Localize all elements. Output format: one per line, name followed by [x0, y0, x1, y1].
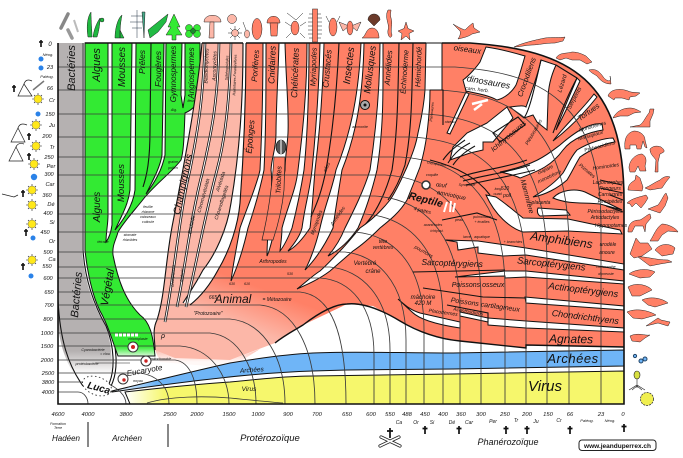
text: fungi: 665	[209, 295, 217, 301]
bottom axis: time values: 2500	[163, 412, 177, 418]
panel: archaea band	[112, 350, 624, 392]
text: fish and amphibians: Poissons osseux	[452, 282, 505, 289]
icons: top row plants and fungi	[61, 10, 250, 40]
bottom axis: periods: Cr	[556, 418, 562, 424]
text: fungi: Basidiomycètes	[203, 48, 211, 84]
text: fungi: Ascomycètes	[211, 51, 219, 82]
text: fungi: Endarés	[179, 268, 185, 282]
bottom axis: time values: 66	[567, 412, 574, 418]
icons: blue stars	[28, 56, 44, 278]
bottom axis: time values: 4600	[52, 412, 65, 418]
text: fish and amphibians: mâchoire	[411, 295, 436, 301]
text: reptiles and birds: Synapside	[459, 183, 475, 187]
icons: extinction crosses and volcanoes	[2, 40, 44, 270]
left axis: time values and periods: 450	[40, 230, 51, 236]
text: fish and amphibians: dipneuste	[598, 272, 614, 276]
left axis: time values and periods: Dé	[47, 202, 55, 208]
text: fungi: ρ	[160, 333, 165, 340]
icon group: fossils on the tree	[276, 100, 488, 212]
bottom axis: time values: 360	[456, 412, 467, 418]
panel: virus band	[125, 371, 624, 404]
bottom axis: time values: 3800	[120, 412, 133, 418]
text: bacteria and plant columns: tétrade	[97, 240, 109, 244]
text: fungi: Sphéropsidales	[225, 55, 229, 80]
left axis: time values and periods: Car	[45, 182, 56, 188]
text: mammals: Hippopotames	[595, 223, 628, 229]
text: mammals: placenta	[531, 200, 551, 206]
text: fish and amphibians: Placodermes	[428, 308, 458, 318]
text: bacteria and plant columns: protéobactérie	[75, 362, 98, 366]
bottom axis: time values: Terre	[54, 426, 62, 430]
left axis: time values and periods: 800	[43, 317, 54, 323]
bottom axis: time values: 1000	[252, 412, 265, 418]
text: bacteria and plant columns: Angiospermes	[187, 47, 196, 100]
text: fungi: Endarés	[187, 215, 197, 235]
text: bacteria and plant columns: rhizome	[142, 210, 154, 214]
icons: archaea and viruses right side	[629, 354, 654, 406]
text: bacteria and plant columns: Bactéries	[69, 271, 85, 318]
left axis: time values and periods: Ju	[48, 123, 55, 129]
text: mammals: Artiodactyles	[590, 215, 620, 221]
text: animal phyla: ammonite	[352, 125, 368, 129]
bottom axis: time values: 600	[366, 412, 377, 418]
era labels	[52, 422, 539, 447]
text: fish and amphibians	[354, 215, 620, 346]
era labels: Protérozoïque	[240, 433, 300, 444]
left axis: time values and periods	[40, 42, 56, 396]
text: reptiles and birds: Crocodiliens	[515, 56, 538, 98]
isochron time lines	[58, 67, 601, 404]
text: fish and amphibians: Vertébré	[354, 261, 377, 267]
text: archaea and virus: Virus	[242, 386, 257, 393]
text: reptiles and birds: Ichthyosaures	[490, 120, 528, 154]
text: animal phyla: Myriapodes	[308, 47, 319, 86]
text: reptiles and birds: Tortues	[576, 101, 601, 123]
icons: suns	[26, 93, 44, 266]
left axis: time values and periods: Or	[49, 239, 56, 245]
text: mammals: Lagomorphes	[593, 180, 624, 186]
bottom axis: extinction crosses	[387, 424, 626, 438]
text: archaea and virus	[126, 351, 599, 395]
text: animal phyla: Porifères	[250, 50, 261, 82]
left axis: time values and periods: 360	[42, 193, 53, 199]
text: animal phyla: Hémichordé	[413, 47, 424, 87]
text: bacteria and plant columns: = clou	[100, 352, 110, 356]
text: bacteria and plant columns: Bactéries	[66, 45, 78, 91]
era labels: Phanérozoïque	[477, 437, 539, 447]
text: bacteria and plant columns: Algues	[92, 192, 103, 223]
panel: fungi and protozoa	[154, 43, 347, 368]
text: bacteria and plant columns: Algues	[91, 48, 103, 83]
text: archaea and virus: Virus	[528, 378, 562, 395]
text: fish and amphibians: Sarcoptérygiens	[517, 255, 586, 274]
left axis: time values and periods: 1000	[41, 331, 54, 337]
bottom axis: time values: 250	[499, 412, 511, 418]
text: bacteria and plant columns: cuticule	[142, 220, 154, 224]
left axis: time values and periods: Ca	[48, 257, 56, 263]
animal branch outlines	[190, 43, 624, 348]
website badge	[579, 440, 656, 450]
text: mammals: Hominoïdes	[592, 162, 620, 172]
fungi outlines	[154, 43, 243, 350]
text: fish and amphibians: Sarcoptérygiens	[421, 257, 484, 269]
bottom axis: periods: Dé	[449, 420, 455, 426]
text: reptiles and birds: ichtyost.	[430, 229, 444, 233]
text: animal phyla: Chélicérates	[289, 47, 301, 98]
bottom axis: time values	[50, 412, 625, 430]
text: reptiles and birds: dinosaures	[466, 73, 512, 91]
left axis: time values and periods: Per	[47, 164, 56, 170]
text: archaea and virus: Archées	[239, 366, 265, 375]
text: mammals: ovipare	[537, 164, 554, 176]
text: mammals: poil	[502, 193, 512, 199]
text: fungi: Animal	[214, 292, 252, 306]
text: reptiles and birds: œuf	[435, 182, 448, 190]
bottom axis: periods: Paléog.	[580, 418, 594, 423]
text: mammals: Marsupiaux	[577, 129, 604, 142]
diagram: LUCA dotted origin and eukaryote cells	[80, 335, 151, 400]
text: bacteria and plant columns: pollen	[167, 166, 178, 170]
text: bacteria and plant columns: mitochondrie	[151, 357, 171, 361]
left axis: time values and periods: 4000	[42, 390, 55, 396]
text: bacteria and plant columns: Gymnospermes	[169, 46, 178, 102]
bottom axis: time values: 0	[621, 412, 625, 418]
text: fish and amphibians: Amphibiens	[529, 229, 594, 251]
text: fish and amphibians: aquatique	[474, 235, 490, 239]
icons: reptile and bird silhouettes	[453, 23, 678, 342]
text: fish and amphibians: pulmonaire	[472, 215, 491, 219]
bottom axis: periods: Or	[413, 420, 419, 426]
text: reptiles and birds: oiseau	[445, 120, 455, 124]
text: fish and amphibians: vertèbres	[373, 245, 394, 251]
text: fungi: = Métazoaire	[262, 297, 292, 303]
text: fish and amphibians: 420 M	[415, 301, 431, 307]
left axis: time values and periods: 23	[46, 65, 54, 71]
text: animal phyla	[229, 45, 424, 286]
panel: plants	[85, 43, 200, 356]
text: mammals: Périssodactyles	[587, 209, 623, 215]
left axis: time values and periods: 200	[41, 134, 53, 140]
left axis: time values and periods: Paléog.	[40, 74, 54, 79]
text: mammals: Mammifère	[519, 179, 534, 215]
text: animal phyla: Éponges	[244, 119, 257, 154]
text: mammals: Carnivores	[598, 192, 623, 198]
text: archaea and virus: noyau	[133, 379, 143, 383]
text: reptiles and birds: long	[495, 187, 501, 191]
text: fish and amphibians: poumons	[412, 244, 434, 260]
text: bacteria and plant columns: fleur	[188, 99, 195, 103]
chart frame	[58, 43, 624, 404]
white slivers between animal phyla	[231, 43, 442, 289]
icon: skull and crossbones	[380, 437, 400, 446]
text: reptiles and birds: ouad.	[494, 192, 502, 196]
trilobite column	[262, 157, 285, 240]
left axis: time values and periods: 2500	[41, 371, 55, 377]
text: fungi: Chromalvéolata	[197, 178, 212, 213]
white reptile and mammal gaps	[398, 47, 624, 332]
panel: animals	[190, 43, 624, 348]
text: reptiles and birds: Lézard	[557, 73, 569, 93]
left axis: time values and periods: 300	[44, 172, 55, 178]
text: animal phyla: Arthropodes	[258, 259, 287, 265]
text: fish and amphibians: Chondrichthyens	[551, 308, 620, 326]
text: fish and amphibians: coelacanthe	[596, 265, 616, 269]
text: mammals: monotrème	[537, 169, 562, 185]
text: reptiles and birds: Thérapsides	[426, 161, 446, 167]
bottom axis: time values: 1500	[223, 412, 236, 418]
bottom axis: periods: Si	[430, 420, 435, 426]
text: animal phyla: Crustacés	[320, 48, 334, 88]
text: fish and amphibians: crâne	[365, 269, 381, 275]
text: mammals: Pinnipèdes	[598, 199, 623, 205]
left axis: time values and periods: 66	[47, 86, 54, 92]
text: reptiles and birds: amniotique	[436, 190, 467, 202]
text: mammals: Monotrèmes	[579, 120, 607, 134]
left axis: time values and periods: 3800	[42, 380, 55, 386]
text: reptiles and birds: Serpents	[567, 87, 583, 111]
website badge: www.jeanduperrex.ch	[583, 443, 651, 450]
text: fungi: Champignons	[172, 153, 195, 216]
left axis: time values and periods: 650	[44, 290, 55, 296]
left axis: time values and periods: 500	[43, 250, 54, 256]
text: reptiles and birds: coquille	[426, 173, 438, 177]
left axis: time values and periods: 250	[43, 155, 55, 161]
text: animal phyla: Insectes	[342, 47, 357, 85]
left axis: time values and periods: 400	[43, 211, 54, 217]
bottom axis: time values: 300	[476, 412, 487, 418]
text: fungi: Champignons	[171, 265, 175, 287]
bottom axis: time values: 550	[385, 412, 396, 418]
text: archaea and virus: Archées	[546, 351, 599, 366]
bottom axis: time values: 4000	[82, 412, 95, 418]
plant lineage gaps	[106, 43, 185, 242]
text: fish and amphibians: Actinoptérygiens	[547, 281, 619, 300]
left axis: time values and periods: 0	[48, 42, 52, 48]
text: bacteria and plant columns: stomate	[124, 233, 136, 237]
text: bacteria and plant columns: graine	[168, 160, 178, 164]
text: fish and amphibians: + écailles	[474, 220, 490, 224]
text: bacteria and plant columns: Végétal	[99, 268, 117, 307]
left axis: time values and periods: Néog.	[43, 52, 53, 57]
era labels: Archéen	[111, 434, 142, 443]
text: fish and amphibians: urodèle	[600, 242, 617, 248]
left axis: time values and periods: Si	[50, 220, 55, 226]
text: fungi: Alvéolata	[215, 171, 227, 193]
left axis: time values and periods: Cr	[49, 98, 56, 104]
text: fungi	[160, 48, 292, 340]
left axis: time values and periods: 2000	[40, 358, 54, 364]
bottom axis: time values: 400	[438, 412, 449, 418]
text: fish and amphibians: Agnates	[548, 332, 593, 346]
text: fish and amphibians: larve	[463, 235, 471, 239]
bottom axis: periods: Néog.	[605, 418, 615, 423]
left axis: time values and periods: 1500	[41, 344, 54, 350]
bottom axis: time values: 23	[597, 412, 605, 418]
panel: bacteria	[58, 43, 116, 386]
text: fish and amphibians: + branchies	[504, 240, 523, 244]
text: bacteria and plant columns: Mousses	[116, 164, 127, 202]
left axis: time values and periods: Tr	[50, 145, 56, 151]
text: bacteria and plant columns: vaisseaux	[140, 215, 156, 219]
text: reptiles and birds: Ptérosaures	[429, 102, 435, 122]
text: reptiles and birds	[407, 43, 601, 233]
sun discs	[28, 95, 42, 264]
text: animal phyla: Annélides	[329, 205, 347, 228]
bottom axis: periods: Per	[489, 419, 497, 425]
text: fish and amphibians: Poissons cartilagineux	[450, 297, 521, 314]
bottom axis: time values: 450	[420, 412, 431, 418]
text: bacteria and plant columns: Cyanobactérie	[81, 348, 105, 352]
text: bacteria and plant columns: Mousses	[117, 47, 128, 87]
text: animal phyla: Échinoderme	[398, 49, 411, 94]
text: reptiles and birds: oiseaux	[453, 43, 483, 56]
era labels: Hadéen	[52, 434, 81, 443]
bottom axis: time values: 488	[402, 412, 413, 418]
bottom axis: time values: Formation	[50, 422, 66, 426]
text: fish and amphibians: anoure	[599, 250, 615, 256]
left axis: time values and periods: 150	[45, 112, 56, 118]
text: fish and amphibians: tête	[379, 239, 387, 245]
bacteria outlines	[58, 43, 116, 386]
diagram: LUCA dotted origin and eukaryote cells: Luca	[86, 380, 112, 397]
left axis: time values and periods: 600	[43, 276, 54, 282]
left axis: time values and periods: 550	[42, 264, 53, 270]
text: animal phyla: 610	[244, 282, 250, 286]
text: mammals: Rongeurs	[599, 186, 621, 192]
text: bacteria and plant columns: Prêles	[137, 49, 147, 74]
text: animal phyla: Annélides	[383, 50, 394, 87]
text: fungi: "Protozoaire"	[193, 311, 223, 317]
icons: top row invertebrates	[252, 9, 414, 42]
text: mammals	[501, 120, 628, 229]
bottom axis: time values: 2000	[190, 412, 204, 418]
text: animal phyla: Mollusques	[362, 45, 379, 94]
text: animal phyla: ailes	[322, 161, 332, 174]
bottom axis: time values: 200	[521, 412, 533, 418]
text: reptiles and birds: acanthodes	[424, 223, 442, 227]
bottom axis: periods: Ju	[532, 419, 539, 425]
text: archaea and virus: Eucaryote	[126, 363, 164, 378]
text: animal phyla: Cnidaires	[266, 45, 278, 84]
text: mammals: Primates	[577, 163, 597, 180]
text: bacteria and plant columns: Alg.	[170, 108, 177, 112]
left axis: time values and periods: 700	[44, 303, 55, 309]
text: fish and amphibians: Acanthodiens	[452, 306, 484, 318]
bottom axis: periods: Tr	[514, 418, 519, 424]
text: animal phyla: 530	[287, 272, 293, 276]
text: bacteria and plant columns: chloroplaste	[128, 337, 148, 341]
text: bacteria and plant columns: feuille	[143, 205, 153, 209]
text: fish and amphibians: peau	[454, 218, 463, 222]
bottom axis: time values: 650	[342, 412, 353, 418]
text: animal phyla: Myriapodes	[310, 209, 324, 236]
text: animal phyla: 630	[229, 282, 235, 286]
bottom axis: time values: 900	[283, 412, 294, 418]
bottom axis: periods	[396, 418, 615, 426]
text: reptiles and birds: carn. herb.	[465, 86, 489, 94]
bottom axis: periods: Ca	[396, 420, 402, 426]
text: fungi: Choanoflagellés	[214, 184, 231, 221]
text: fungi: Radiolaires Foraminifères	[232, 54, 238, 95]
text: mammals: Proboscidiens	[584, 140, 616, 154]
text: reptiles and birds: Plésiosaures	[524, 118, 544, 146]
text: mammals: 510	[501, 186, 509, 192]
bottom axis: time values: 150	[543, 412, 554, 418]
bottom axis: periods: Car	[465, 420, 473, 426]
bottom axis: time values: 700	[312, 412, 323, 418]
text: bacteria and plant columns	[66, 45, 196, 366]
text: reptiles and birds: 4 pattes	[413, 206, 432, 216]
text: bacteria and plant columns: rhizoïdes	[123, 238, 137, 242]
text: reptiles and birds: Reptile	[407, 190, 444, 210]
text: animal phyla: Trilobites	[276, 165, 284, 194]
text: bacteria and plant columns: Fougères	[153, 50, 163, 87]
